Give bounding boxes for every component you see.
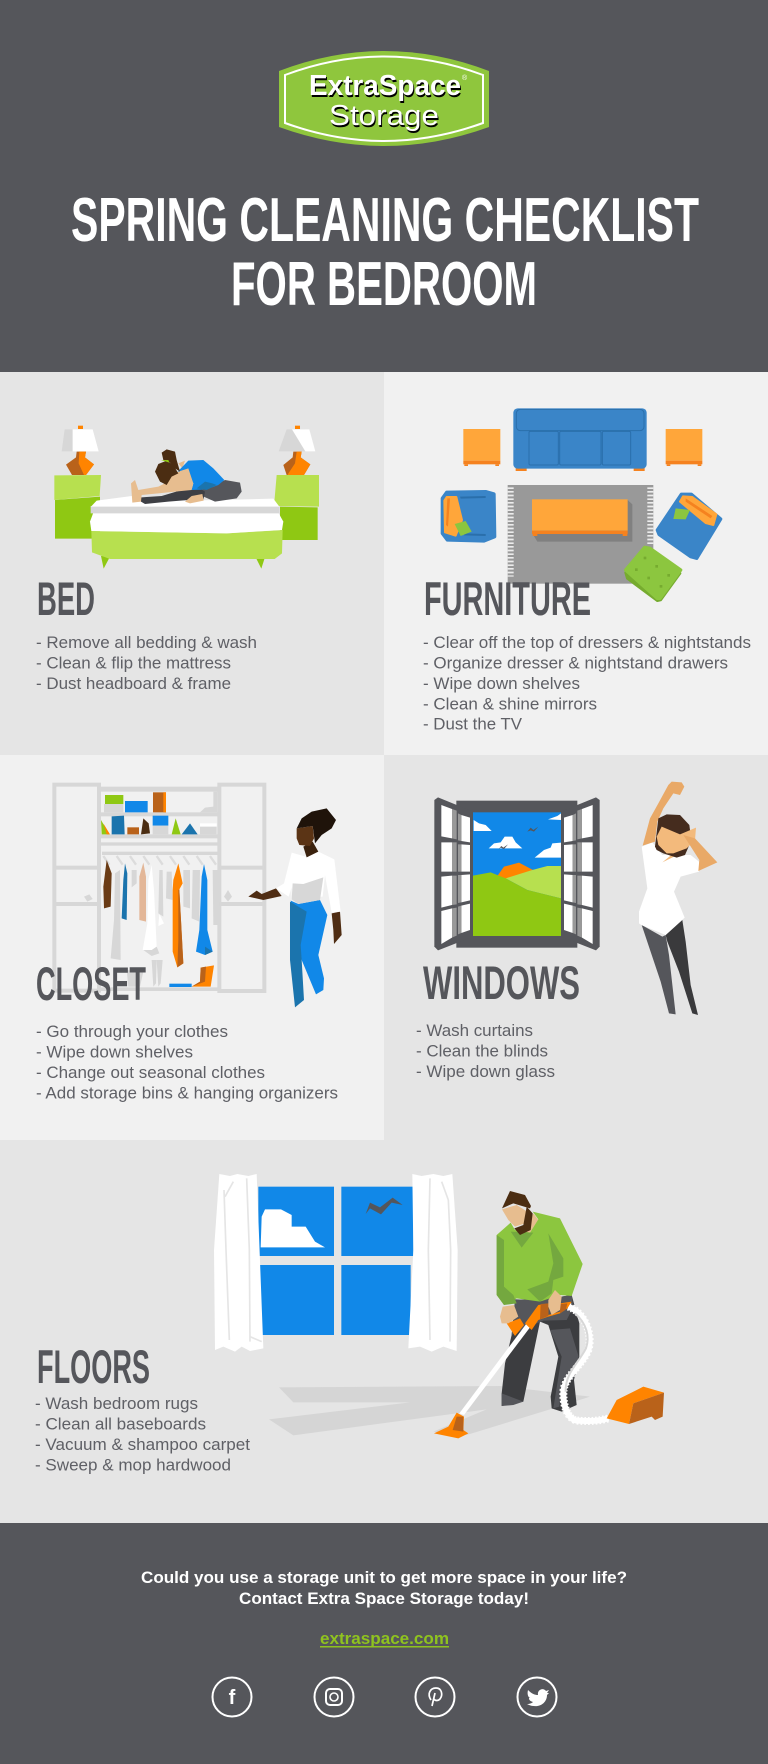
list: closet tasks: - Go through your clothes <box>36 1022 228 1041</box>
logo: Extra Space Storage <box>279 51 489 146</box>
icon: twitter <box>518 1678 556 1716</box>
list: window tasks: - Wipe down glass <box>416 1062 555 1081</box>
list: floor tasks: - Vacuum & shampoo carpet <box>35 1435 250 1454</box>
list: bed tasks: - Remove all bedding & wash <box>36 633 257 652</box>
heading: BED: BED <box>37 572 95 625</box>
logo: Extra Space Storage: ExtraSpace <box>309 70 461 102</box>
panel: windows <box>384 755 768 1140</box>
panel: furniture <box>384 372 768 755</box>
link: extraspace.com: extraspace.com <box>320 1629 449 1648</box>
list: furniture tasks: - Organize dresser & nightstand drawers <box>423 654 728 672</box>
list: furniture tasks: - Clean & shine mirrors <box>423 694 597 714</box>
heading: CLOSET: CLOSET <box>36 957 146 1010</box>
logo: Extra Space Storage: ExtraSpace <box>310 72 462 104</box>
illustration: hanging clothes <box>102 852 219 987</box>
list: bed tasks: - Clean & flip the mattress <box>36 654 231 672</box>
illustration: man upper body <box>497 1191 583 1336</box>
window shutter: right <box>561 797 600 950</box>
illustration: closet frame and shelves <box>54 785 264 991</box>
list: furniture tasks: - Dust the TV <box>423 714 523 734</box>
illustration: bed with lamps and nightstands <box>54 426 319 569</box>
call to action text: Could you use a storage unit to get more space in your life? <box>141 1568 627 1587</box>
illustration: furniture layout <box>442 408 721 601</box>
heading: FLOORS: FLOORS <box>37 1340 150 1393</box>
list: furniture tasks: - Wipe down shelves <box>423 674 580 693</box>
list: window tasks: - Clean the blinds <box>416 1042 548 1060</box>
logo: Extra Space Storage: Storage <box>330 102 440 134</box>
title: FOR BEDROOM <box>231 250 537 319</box>
heading: WINDOWS: WINDOWS <box>423 956 580 1009</box>
panel: header <box>0 0 768 372</box>
list: bed tasks: - Dust headboard & frame <box>36 674 231 693</box>
list: furniture tasks: - Clear off the top of dressers & nightstands <box>423 633 751 652</box>
title <box>71 186 699 319</box>
panel: closet <box>0 755 384 1140</box>
icon: facebook: f <box>229 1687 236 1709</box>
list: window tasks <box>416 1021 555 1081</box>
list: closet tasks: - Change out seasonal clothes <box>36 1063 265 1082</box>
panel: floors <box>0 1140 768 1523</box>
call to action text <box>141 1568 627 1608</box>
illustration: window, shadows and vacuum legs <box>214 1174 664 1438</box>
panel: footer <box>0 1523 768 1764</box>
list: closet tasks <box>36 1022 338 1102</box>
icon: instagram <box>314 1678 354 1716</box>
logo: Extra Space Storage: Storage <box>329 100 439 132</box>
list: bed tasks <box>36 633 257 693</box>
illustration: woman at closet <box>248 808 342 1007</box>
list: floor tasks <box>35 1394 250 1474</box>
list: floor tasks: - Clean all baseboards <box>35 1414 206 1434</box>
list: furniture tasks <box>423 633 751 734</box>
icon: facebook <box>212 1678 252 1716</box>
call to action text: Contact Extra Space Storage today! <box>239 1589 529 1608</box>
logo: Extra Space Storage: ® <box>462 74 468 82</box>
illustration: stretching woman head and arms <box>643 782 717 871</box>
window shutter: left <box>434 797 473 950</box>
list: closet tasks: - Wipe down shelves <box>36 1042 193 1062</box>
illustration: open window <box>434 797 699 1015</box>
illustration: stretching woman <box>131 449 242 504</box>
list: closet tasks: - Add storage bins & hanging organizers <box>36 1084 338 1102</box>
heading: FURNITURE: FURNITURE <box>424 572 591 625</box>
panel: bed <box>0 372 384 755</box>
icon: pinterest <box>416 1678 454 1716</box>
list: floor tasks: - Wash bedroom rugs <box>35 1394 198 1413</box>
list: window tasks: - Wash curtains <box>416 1021 533 1040</box>
list: floor tasks: - Sweep & mop hardwood <box>35 1456 231 1474</box>
